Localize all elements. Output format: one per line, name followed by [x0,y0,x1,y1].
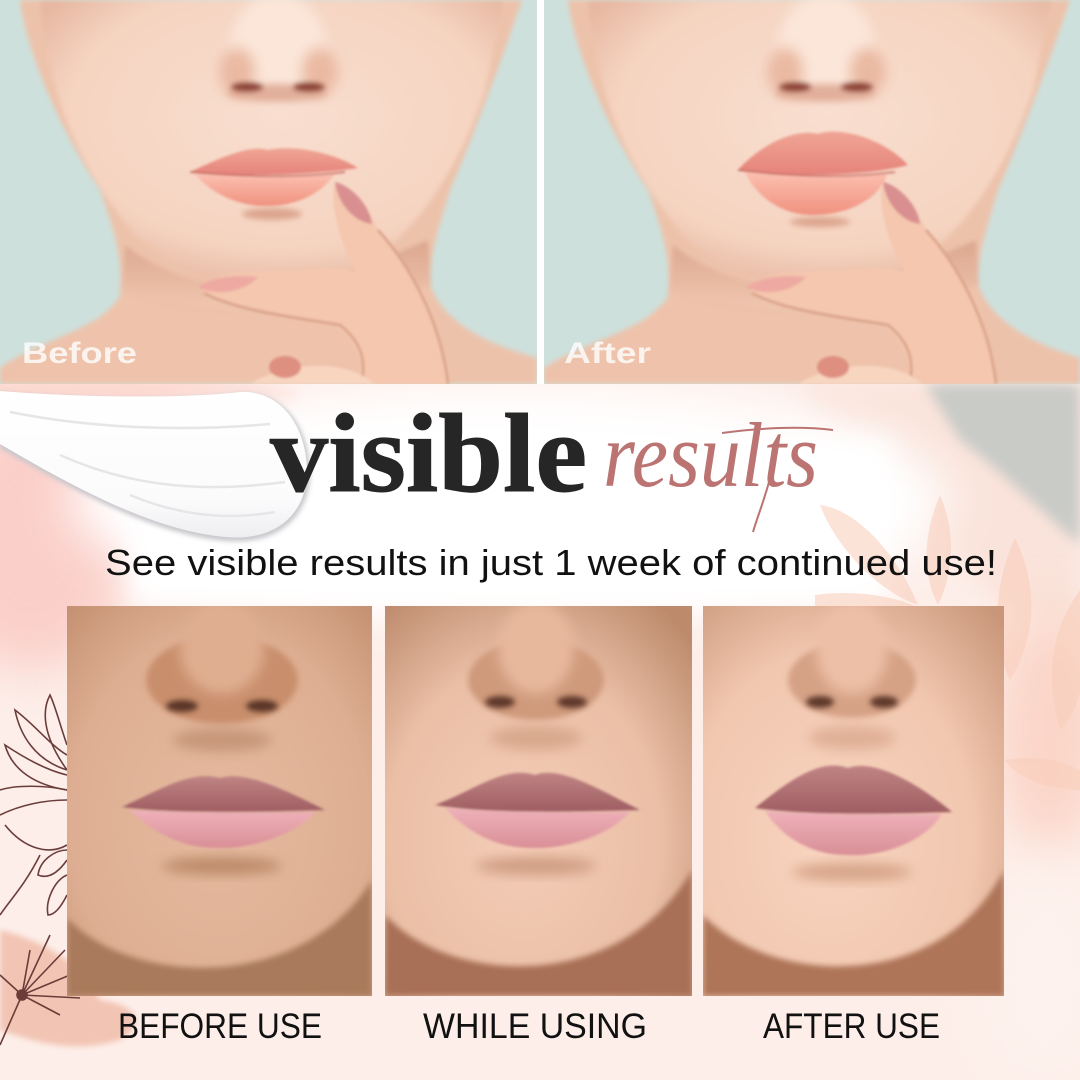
label: Before: Before [22,337,137,370]
panel: top-left before photo [0,0,537,384]
icon: cream smear [0,391,310,541]
label: After: After [564,337,651,370]
heading: visible results [270,392,833,532]
icon: pale flower right [815,495,1080,790]
icon: flower outline left [0,695,80,1045]
subtitle: See visible results in just 1 week of continued use! [105,542,997,583]
panel: top-right after photo [544,0,1080,384]
photo: while using [385,602,692,996]
photo: before use [67,602,372,996]
heading: visible results: results [603,404,818,506]
label: while using: WHILE USING [423,1007,647,1046]
label: after use: AFTER USE [763,1007,940,1046]
photo: after use [703,602,1004,996]
panel: watercolor background [0,377,1080,1080]
label: before use: BEFORE USE [118,1007,322,1046]
heading: visible results: visible [270,392,587,516]
